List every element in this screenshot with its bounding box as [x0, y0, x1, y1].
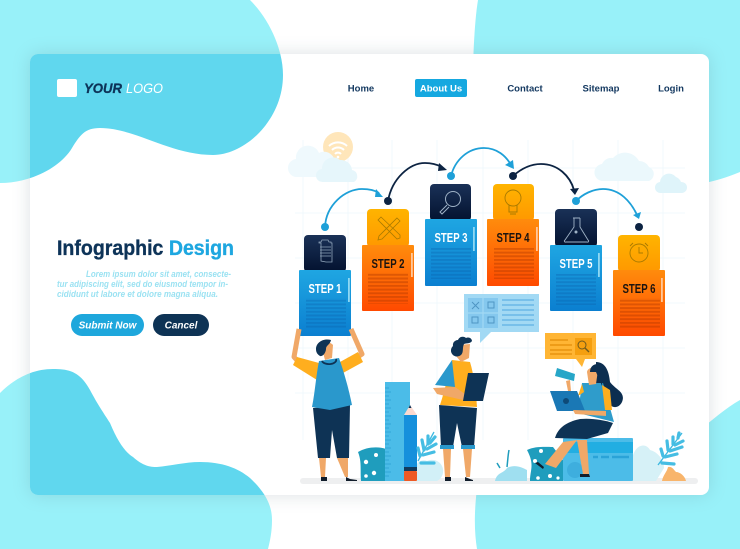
arrow: step 4 to step 5 — [509, 164, 579, 195]
navigation: Contact — [507, 84, 544, 94]
step 1 card: STEP 1 — [308, 282, 342, 296]
arrow: step 3 to step 4 — [447, 148, 514, 180]
step 4 card: STEP 4 — [496, 231, 530, 245]
step 3 card — [425, 184, 477, 286]
person 2 with clipboard — [433, 337, 489, 481]
card panel: top left tint — [30, 54, 283, 178]
speech bubble: search — [545, 333, 596, 367]
cloud with wifi icon — [288, 132, 357, 182]
plant: fern and shrub — [417, 432, 443, 481]
description text: tur adipiscing elit, sed do eiusmod tempor in- — [57, 279, 228, 289]
logo: YOUR — [84, 80, 123, 96]
card panel: bottom left tint — [30, 369, 264, 495]
arrow: step 5 to step 6 — [572, 189, 641, 219]
button: submit now: Submit Now — [79, 320, 138, 332]
navigation: About Us — [420, 84, 462, 94]
arrow: step 1 to step 2 — [321, 189, 383, 231]
navigation: Login — [658, 84, 684, 94]
step 4 card — [487, 184, 539, 286]
background blob: top right — [473, 0, 740, 184]
button: cancel — [153, 314, 209, 336]
description text: Lorem ipsum dolor sit amet, consecte- — [86, 269, 231, 279]
step 2 card: STEP 2 — [372, 257, 405, 271]
floor — [300, 478, 698, 484]
navigation: Sitemap — [583, 84, 620, 94]
person 1 holding step card — [293, 329, 363, 481]
step 3 card: STEP 3 — [434, 231, 468, 245]
description text — [57, 269, 231, 299]
speech bubble: idea grid — [464, 294, 539, 343]
step 6 marker dot — [635, 223, 643, 231]
description text: cididunt ut labore et dolore magna aliqua. — [57, 289, 218, 299]
step 6 card: STEP 6 — [622, 282, 656, 296]
background blob: top left — [0, 0, 283, 183]
logo — [57, 79, 163, 97]
logo: LOGO — [126, 80, 163, 96]
cloud: large right — [594, 153, 654, 181]
button: cancel: Cancel — [165, 320, 198, 332]
navigation — [348, 79, 684, 97]
title: Infographic Design — [57, 236, 234, 260]
step 6 card — [613, 235, 665, 336]
step 2 card — [362, 209, 414, 311]
step 5 card: STEP 5 — [560, 257, 593, 271]
button: submit now — [71, 314, 144, 336]
plant: left monstera — [358, 447, 386, 481]
navigation: Home — [348, 84, 374, 94]
step 1 card — [299, 235, 351, 336]
box seat — [563, 438, 633, 481]
ruler — [385, 382, 410, 481]
step 5 card — [550, 209, 602, 311]
pencil — [404, 405, 417, 481]
card shadow — [30, 54, 709, 495]
plants around the box — [495, 433, 686, 481]
background blob: bottom left — [0, 369, 272, 549]
background blob: bottom right — [475, 400, 740, 549]
person 3 with laptop and megaphone — [535, 362, 623, 477]
cloud: small right — [655, 174, 687, 193]
landing page card — [30, 54, 709, 495]
arrow: step 2 to step 3 — [384, 163, 447, 205]
